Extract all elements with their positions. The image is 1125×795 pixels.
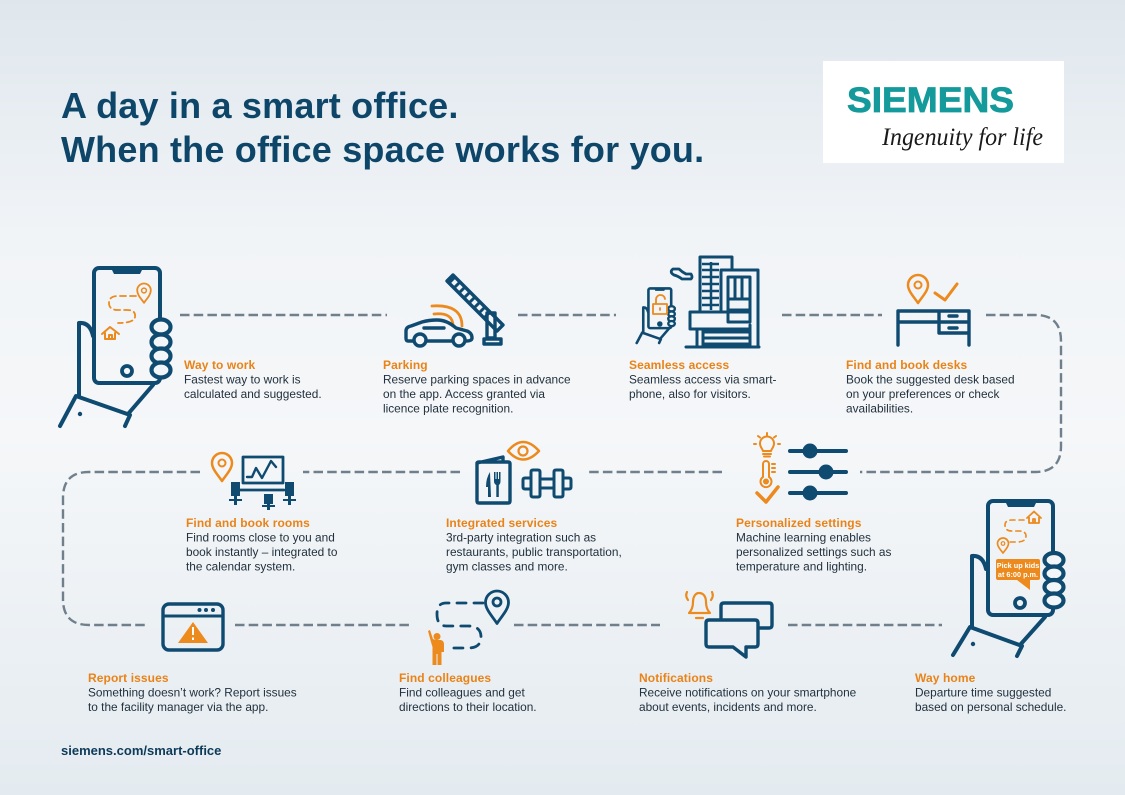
panel: report issues xyxy=(88,604,297,714)
heading: Integrated services xyxy=(446,516,558,530)
body text: directions to their location. xyxy=(399,700,537,714)
logo: Siemens xyxy=(823,61,1064,163)
title xyxy=(61,85,704,170)
title: When the office space works for you. xyxy=(61,129,704,170)
icon: bell and speech bubbles xyxy=(686,592,772,657)
panel: notifications xyxy=(639,592,857,714)
icon: meeting room xyxy=(212,453,296,510)
icon: settings sliders, bulb, thermometer and check xyxy=(754,433,846,502)
panel: personalized settings xyxy=(736,433,891,574)
panel: parking xyxy=(383,275,571,416)
panel: seamless access xyxy=(629,257,776,401)
dashed connector path xyxy=(63,315,1061,625)
body text: to the facility manager via the app. xyxy=(88,700,268,714)
body text: restaurants, public transportation, xyxy=(446,545,622,559)
heading: Way to work xyxy=(184,358,256,372)
heading: Find and book rooms xyxy=(186,516,310,530)
body text: Fastest way to work is xyxy=(184,372,301,386)
title: A day in a smart office. xyxy=(61,85,459,126)
heading: Find colleagues xyxy=(399,671,491,685)
icon: hand holding phone with reminder: Pick up kids xyxy=(997,561,1039,570)
panel: find and book desks xyxy=(846,275,1015,416)
panel: integrated services xyxy=(446,442,622,574)
body text: Reserve parking spaces in advance xyxy=(383,372,571,386)
logo: Siemens: Ingenuity for life xyxy=(881,124,1043,151)
icon: hand holding phone with reminder xyxy=(953,501,1064,656)
icon: phone and office building xyxy=(637,257,759,347)
body text: based on personal schedule. xyxy=(915,700,1066,714)
heading: Personalized settings xyxy=(736,516,862,530)
body text: Departure time suggested xyxy=(915,686,1051,700)
panel: find and book rooms xyxy=(186,453,338,574)
icon: hand holding phone with route xyxy=(60,268,170,426)
body text: licence plate recognition. xyxy=(383,402,513,416)
icon: menu, eye and dumbbell xyxy=(477,442,571,503)
body text: Receive notifications on your smartphone xyxy=(639,686,857,700)
panel: way home xyxy=(915,501,1066,714)
icon: car and barrier xyxy=(406,275,503,346)
icon: hand holding phone with reminder: at 6:00 p.m. xyxy=(998,570,1038,579)
body text: Seamless access via smart- xyxy=(629,372,776,386)
heading: Find and book desks xyxy=(846,358,967,372)
body text: Something doesn’t work? Report issues xyxy=(88,686,297,700)
panel: find colleagues xyxy=(399,591,537,714)
body text: phone, also for visitors. xyxy=(629,387,751,401)
body text: on your preferences or check xyxy=(846,387,999,401)
heading: Seamless access xyxy=(629,358,729,372)
heading: Parking xyxy=(383,358,428,372)
body text: gym classes and more. xyxy=(446,560,568,574)
panel: way to work xyxy=(60,268,322,426)
icon: desk with pin and check xyxy=(898,275,969,345)
body text: Machine learning enables xyxy=(736,530,871,544)
heading: Way home xyxy=(915,671,976,685)
icon: browser window with warning xyxy=(163,604,223,650)
body text: 3rd-party integration such as xyxy=(446,530,596,544)
icon: route to colleague xyxy=(428,591,508,665)
body text: Book the suggested desk based xyxy=(846,372,1015,386)
body text: availabilities. xyxy=(846,402,913,416)
body text: the calendar system. xyxy=(186,560,295,574)
heading: Notifications xyxy=(639,671,713,685)
heading: Report issues xyxy=(88,671,169,685)
body text: Find colleagues and get xyxy=(399,686,525,700)
footer link: siemens.com/smart-office xyxy=(61,743,221,758)
body text: personalized settings such as xyxy=(736,545,891,559)
body text: Find rooms close to you and xyxy=(186,530,335,544)
body text: book instantly – integrated to xyxy=(186,545,338,559)
body text: calculated and suggested. xyxy=(184,387,322,401)
body text: on the app. Access granted via xyxy=(383,387,545,401)
logo: Siemens: SIEMENS xyxy=(847,81,1014,120)
body text: about events, incidents and more. xyxy=(639,700,817,714)
body text: temperature and lighting. xyxy=(736,560,867,574)
